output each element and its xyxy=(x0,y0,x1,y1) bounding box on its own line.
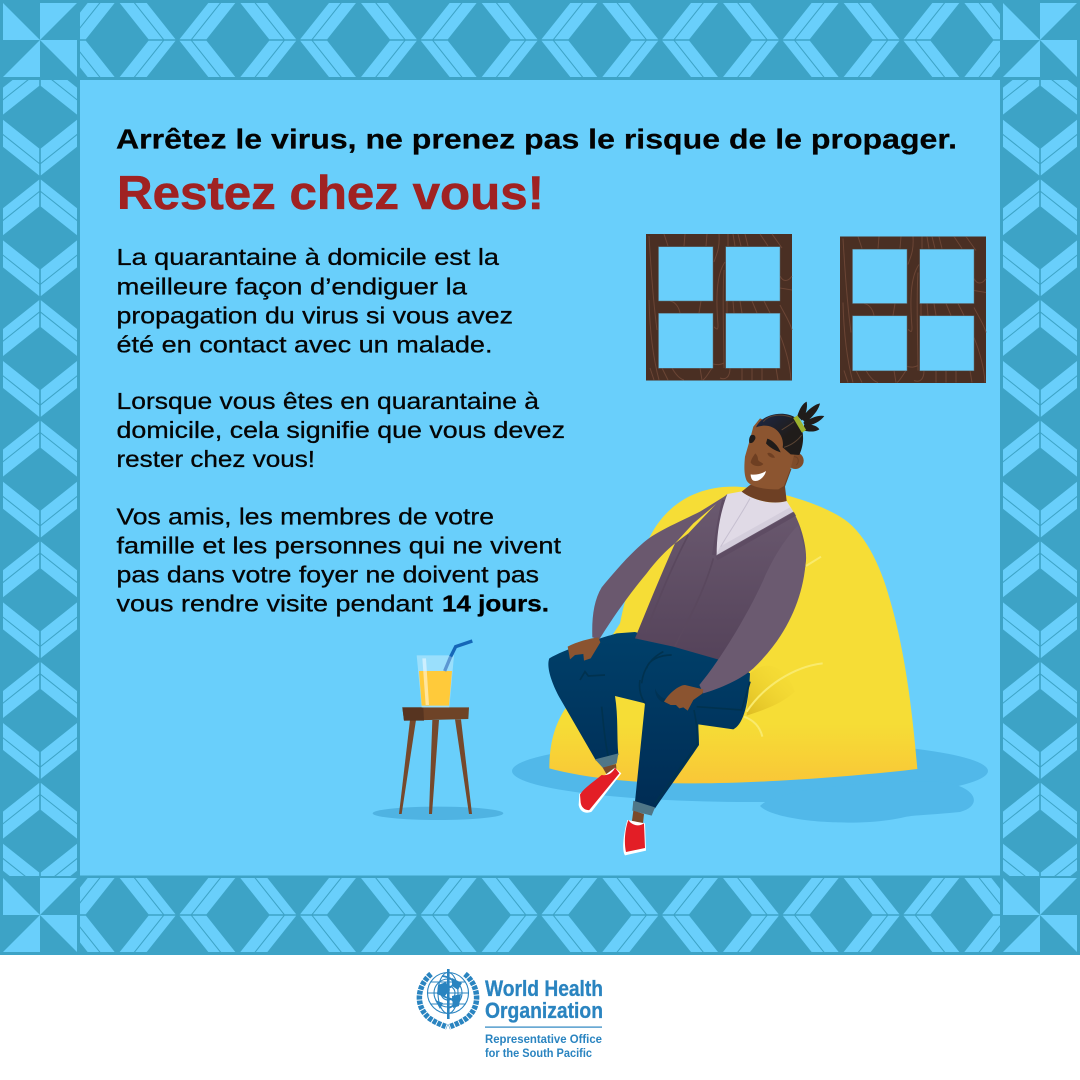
hair band xyxy=(795,417,804,431)
text block: meaning of quarantine: domicile, cela signifie que vous devez xyxy=(116,417,565,443)
ear xyxy=(787,452,804,469)
face xyxy=(744,418,794,489)
bean bag crease xyxy=(744,557,823,737)
trouser cuffs xyxy=(595,753,655,816)
text block: no visitors for 14 days: 14 jours. xyxy=(442,590,549,616)
text block: meaning of quarantine: rester chez vous! xyxy=(116,446,315,472)
text block: home quarantine: été en contact avec un malade. xyxy=(116,332,492,358)
border: bottom band xyxy=(80,878,1000,952)
bean bag xyxy=(549,487,917,783)
text block: no visitors for 14 days xyxy=(116,504,562,616)
text block: home quarantine: propagation du virus si vous avez xyxy=(116,302,513,328)
smile xyxy=(751,471,766,481)
right shoe xyxy=(623,820,646,855)
cardigan torso xyxy=(635,494,806,660)
text block: home quarantine xyxy=(116,244,513,358)
heading: stay at home: Restez chez vous! xyxy=(117,167,544,220)
border: right band xyxy=(1003,80,1077,876)
logo footer xyxy=(419,969,603,1060)
organization name: Organization xyxy=(485,998,603,1023)
eyebrows xyxy=(749,435,781,452)
text block: no visitors for 14 days: pas dans votre foyer ne doivent pas xyxy=(116,562,539,588)
illustration: right window xyxy=(840,236,986,383)
text block: home quarantine: La quarantaine à domicile est la xyxy=(116,244,500,270)
WHO emblem xyxy=(419,969,477,1027)
illustration: man on bean bag xyxy=(548,402,917,855)
left hand xyxy=(568,637,600,661)
closed eye and nose xyxy=(751,453,775,466)
heading: stop the virus: Arrêtez le virus, ne prenez pas le risque de le propager. xyxy=(116,124,957,154)
neck xyxy=(742,468,792,502)
table legs xyxy=(399,719,472,814)
illustration: side table with juice xyxy=(373,641,503,820)
text block: home quarantine: meilleure façon d’endiguer la xyxy=(116,274,468,300)
text block: meaning of quarantine xyxy=(116,388,565,472)
ankles xyxy=(603,764,644,827)
hair xyxy=(756,402,824,455)
border: top band xyxy=(80,3,1000,77)
straw xyxy=(445,641,472,671)
right hand xyxy=(664,685,703,711)
regional office name: Representative Office xyxy=(485,1032,602,1046)
text block: meaning of quarantine: Lorsque vous êtes en quarantaine à xyxy=(116,388,540,414)
illustration: floor shadow xyxy=(512,740,988,823)
table top xyxy=(402,707,469,721)
organization name xyxy=(485,976,603,1023)
left shoe xyxy=(579,768,621,813)
border: left band xyxy=(3,80,77,876)
left sleeve xyxy=(592,495,727,639)
text block: no visitors for 14 days: vous rendre visite pendant xyxy=(116,590,434,616)
dreadlocks xyxy=(797,402,824,432)
regional office name xyxy=(485,1032,602,1060)
text block: no visitors for 14 days: Vos amis, les membres de votre xyxy=(116,504,494,530)
table shadow xyxy=(373,807,503,820)
shirt xyxy=(714,491,795,558)
right sleeve xyxy=(699,525,806,693)
illustration: left window xyxy=(646,234,792,380)
main light blue panel xyxy=(80,80,1000,876)
jeans xyxy=(548,632,750,808)
regional office name: for the South Pacific xyxy=(485,1046,592,1060)
organization name: World Health xyxy=(485,976,603,1001)
text block: no visitors for 14 days: famille et les personnes qui ne vivent xyxy=(116,532,562,558)
glass of juice xyxy=(417,655,454,707)
